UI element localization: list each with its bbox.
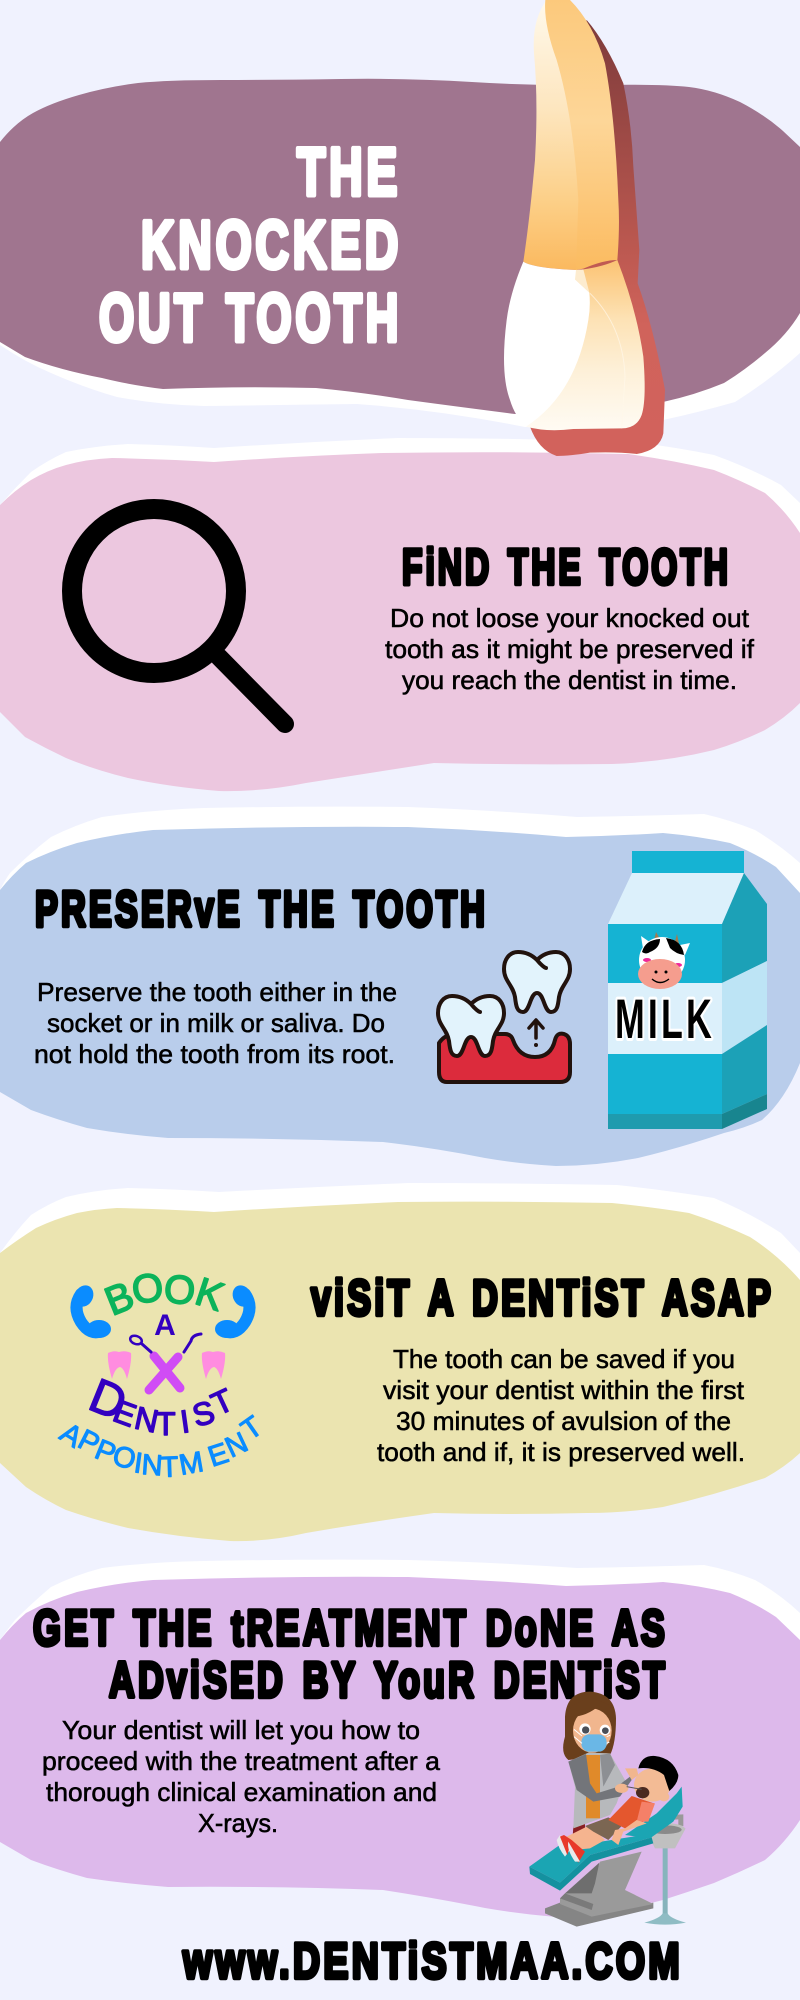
- text: get the treatment: X-rays.: [198, 1808, 278, 1838]
- heading: preserve the tooth: PRESERvE THE TOOTH: [35, 881, 488, 937]
- child patient: [557, 1756, 678, 1863]
- word: book: BOOK: [99, 1265, 229, 1324]
- badge: book a dentist appointment: [54, 1265, 269, 1484]
- text: visit a dentist: 30 minutes of avulsion of the: [396, 1406, 731, 1436]
- word: dentist: DENTIST: [82, 1369, 239, 1442]
- panel: title: [0, 79, 800, 428]
- text: preserve the tooth: Preserve the tooth either in the: [37, 977, 397, 1007]
- heading: get the treatment done: [33, 1600, 668, 1708]
- icon: milk carton: [608, 851, 767, 1129]
- word: appointment: APPOINTMENT: [54, 1410, 269, 1484]
- text: visit a dentist: The tooth can be saved if you: [393, 1344, 735, 1374]
- icon: tooth lifting out of gum socket: [438, 952, 570, 1082]
- panel: tooth shadow and root: [504, 0, 665, 456]
- title heading: KNOCKED: [141, 207, 402, 283]
- title heading: THE: [297, 134, 401, 210]
- illustration: dentist treating child: [529, 1692, 686, 1927]
- icon: crossed dental tools: [129, 1334, 201, 1390]
- label: milk: MILK: [615, 987, 715, 1050]
- dental chair: [529, 1787, 683, 1891]
- title heading: [99, 134, 402, 356]
- dentist: [563, 1692, 632, 1837]
- text: preserve the tooth: not hold the tooth from its root.: [34, 1039, 395, 1069]
- icon: phone left: [71, 1282, 111, 1338]
- text: visit a dentist: [377, 1344, 745, 1467]
- tray stand: [644, 1814, 686, 1925]
- icon: pink tooth right: [202, 1351, 225, 1379]
- panel: get the treatment: [0, 1560, 800, 1927]
- text: get the treatment: thorough clinical examination and: [46, 1777, 437, 1807]
- text: preserve the tooth: socket or in milk or saliva. Do: [47, 1008, 385, 1038]
- text: preserve the tooth: [34, 977, 397, 1069]
- text: visit a dentist: tooth and if, it is preserved well.: [377, 1437, 745, 1467]
- icon: magnifying glass: [72, 509, 285, 724]
- word: a: A: [154, 1309, 176, 1342]
- icon: phone right: [215, 1282, 255, 1338]
- text: find the tooth: [385, 603, 755, 695]
- text: find the tooth: you reach the dentist in time.: [402, 665, 737, 695]
- text: get the treatment: Your dentist will let you how to: [62, 1715, 420, 1745]
- text: visit a dentist: visit your dentist within the first: [383, 1375, 745, 1405]
- text: get the treatment: proceed with the treatment after a: [42, 1746, 441, 1776]
- text: find the tooth: Do not loose your knocked out: [390, 603, 750, 633]
- panel: visit a dentist: [0, 1183, 800, 1541]
- icon: cow face: [638, 932, 690, 989]
- panel: preserve the tooth: [0, 807, 800, 1166]
- icon: pink tooth left: [108, 1351, 131, 1379]
- text: get the treatment: [42, 1715, 441, 1838]
- chair base: [545, 1852, 653, 1927]
- title heading: OUT TOOTH: [99, 280, 402, 356]
- text: find the tooth: tooth as it might be preserved if: [385, 634, 755, 664]
- panel: find the tooth: [0, 438, 800, 791]
